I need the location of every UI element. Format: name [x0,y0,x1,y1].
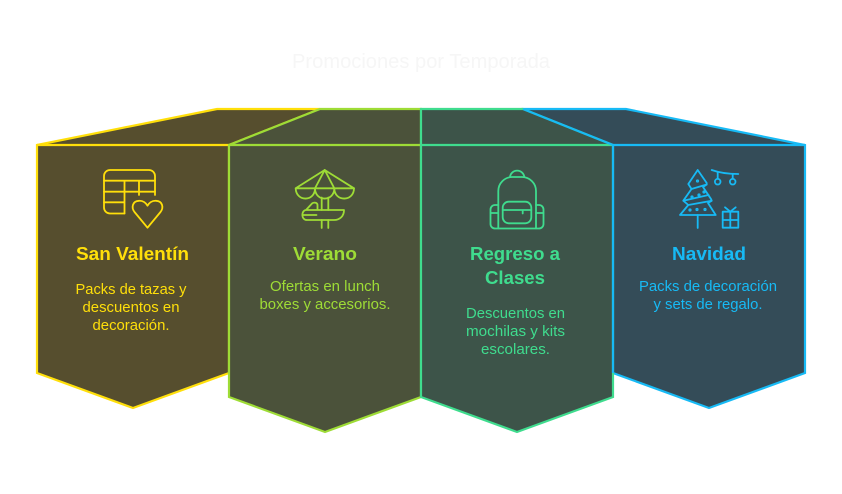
text: Navidad description: y sets de regalo. [654,297,762,313]
panel: Navidad [523,109,805,408]
text: Verano description: boxes y accesorios. [260,297,390,313]
title: Promociones por Temporada [292,51,551,73]
text: San Valentín description [76,282,187,334]
heading: Verano: Verano [293,243,357,264]
panel: San Valentín [37,109,320,408]
heading: Navidad: Navidad [672,243,746,264]
heading: Regreso a Clases: Clases [485,267,545,288]
icon: beach umbrella and lounger [296,170,354,228]
icon: calendar with heart [104,170,162,228]
text: Regreso a Clases description [466,306,565,358]
text: Verano description: Ofertas en lunch [270,279,380,295]
text: Regreso a Clases description: Descuentos en [466,306,565,322]
text: Navidad description: Packs de decoración [639,279,777,295]
panel: Verano [229,109,421,432]
text: San Valentín description: decoración. [92,318,170,334]
text: Navidad description [639,279,777,313]
heading: San Valentín: San Valentín [76,243,189,264]
panel: Regreso a Clases [421,109,613,432]
heading: Regreso a Clases [470,243,561,288]
icon: christmas tree, lights and gift [680,170,738,228]
text: San Valentín description: descuentos en [82,300,180,316]
panel edge: Navidad overlap [523,109,613,373]
text: Regreso a Clases description: escolares. [481,342,550,358]
text: Regreso a Clases description: mochilas y kits [466,324,565,340]
text: Verano description [260,279,390,313]
heading: Regreso a Clases: Regreso a [470,243,561,264]
icon: backpack [490,171,544,228]
text: San Valentín description: Packs de tazas y [76,282,187,298]
